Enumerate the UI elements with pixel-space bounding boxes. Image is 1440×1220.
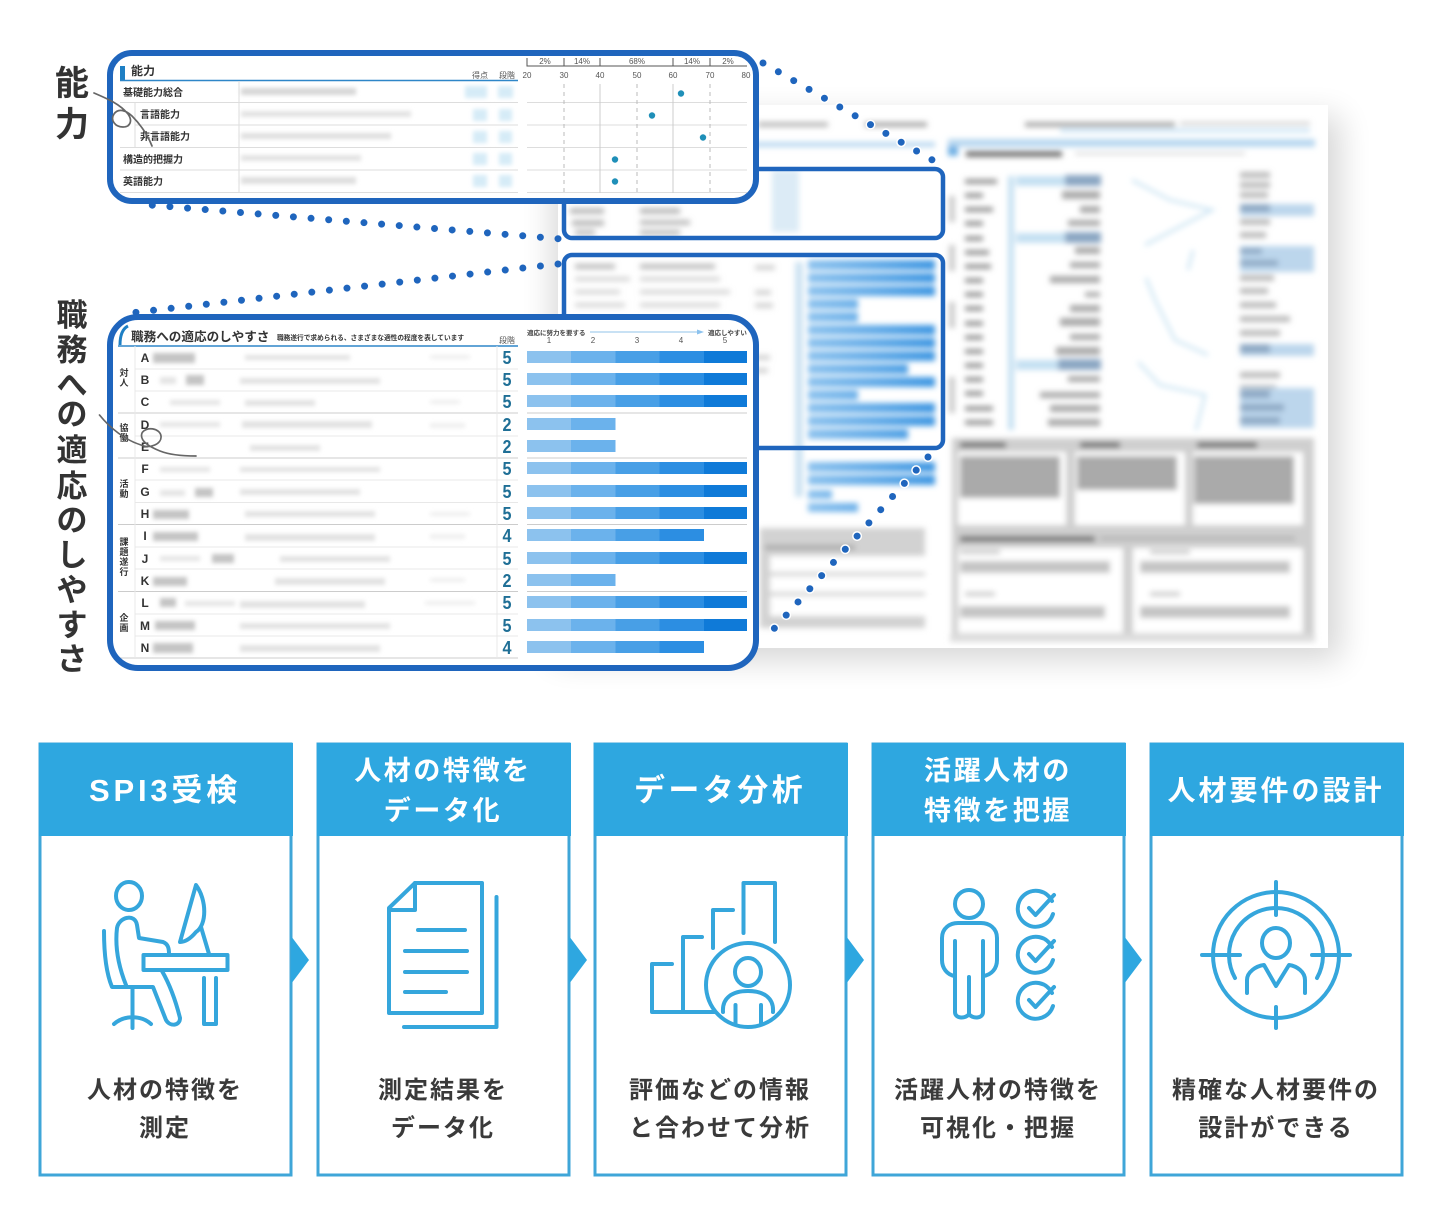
card 4 text: 可視化・把握	[920, 1115, 1076, 1142]
card 2 text: 測定結果を	[378, 1077, 508, 1104]
stage numbers	[502, 348, 512, 658]
score chart: 80	[742, 71, 751, 80]
card 1 text	[87, 1077, 243, 1142]
card 3 heading: データ分析	[634, 773, 806, 808]
heading: ability: 能力	[131, 63, 155, 78]
ability rows: 言語能力	[140, 108, 180, 121]
heading: job fit: 段階	[499, 335, 515, 345]
row letters: I	[143, 529, 147, 543]
card 3 text	[629, 1077, 811, 1142]
stage numbers: 5	[502, 459, 512, 479]
category labels: 題	[119, 547, 129, 557]
stage numbers: 5	[502, 504, 512, 524]
bar scale: 適応に努力を要する	[527, 328, 586, 337]
ability rows: 非言語能力	[140, 130, 190, 143]
row letters: F	[141, 462, 149, 476]
row letters: B	[141, 373, 150, 387]
panel: job fit zoom	[110, 317, 756, 668]
score chart: 30	[560, 71, 569, 80]
dotted connectors	[130, 63, 934, 641]
card 1 heading: SPI3受検	[89, 773, 241, 808]
bar scale: 2	[591, 336, 596, 345]
table column labels: 得点	[472, 70, 488, 80]
arrow 4	[1124, 936, 1142, 984]
card 5 text: 設計ができる	[1198, 1114, 1354, 1142]
score chart: 50	[633, 71, 642, 80]
highlight box: job fit section	[564, 255, 943, 448]
stage numbers: 5	[502, 593, 512, 613]
label: ability: 能力	[55, 65, 89, 144]
label: job fit: 職務への適応のしやすさ	[56, 298, 88, 677]
heading: job fit: 職務遂行で求められる、さまざまな適性の程度を表しています	[277, 333, 464, 342]
row letters: N	[141, 641, 149, 655]
arrow 2	[569, 936, 587, 984]
leader line: ability	[94, 93, 152, 146]
score chart	[523, 57, 751, 193]
category labels: 画	[119, 623, 129, 633]
blurred ability text	[241, 86, 513, 187]
left column	[570, 208, 715, 269]
heading: job fit: 職務への適応のしやすさ	[131, 329, 269, 344]
ability rows	[120, 81, 747, 193]
icon: target person	[1202, 882, 1350, 1028]
category labels: 行	[119, 566, 129, 577]
category labels: 対	[119, 367, 129, 378]
category labels: 働	[119, 432, 129, 443]
step card 2	[317, 743, 571, 1175]
step card 4	[872, 743, 1126, 1175]
stage numbers: 2	[502, 415, 512, 435]
card 4 heading: 活躍人材の	[924, 756, 1072, 786]
ability rows: 基礎能力総合	[123, 86, 183, 99]
score chart: 20	[523, 71, 532, 80]
icon: person with checks	[942, 890, 1054, 1019]
card 1 text: 測定	[139, 1115, 191, 1142]
icon: document	[389, 883, 496, 1027]
score chart: 2%	[539, 57, 551, 66]
card 2 heading: 人材の特徴を	[354, 756, 532, 786]
gray boxes right	[952, 438, 1314, 638]
category labels: 課	[119, 537, 129, 547]
heading: ability	[120, 64, 154, 80]
stage numbers: 2	[502, 571, 512, 591]
panel: ability zoom	[110, 53, 756, 201]
row letters: C	[141, 395, 150, 409]
card 5 text: 精確な人材要件の	[1172, 1077, 1380, 1104]
card 2 heading	[354, 756, 532, 826]
stage numbers: 5	[502, 616, 512, 636]
blurred row text	[153, 353, 475, 653]
row labels	[965, 179, 997, 425]
row letters: K	[141, 574, 150, 588]
category labels: 遂	[119, 556, 129, 567]
row letters: E	[141, 440, 149, 454]
score chart: 14%	[574, 57, 590, 66]
stage numbers: 5	[502, 482, 512, 502]
icon: bars and person	[652, 883, 790, 1027]
bar scale	[527, 330, 746, 343]
step card 5	[1150, 743, 1404, 1175]
row letters: J	[142, 552, 148, 566]
category labels: 活	[119, 478, 129, 489]
card 4 text	[894, 1077, 1102, 1142]
score chart: 68%	[629, 57, 645, 66]
card 1 text: 人材の特徴を	[87, 1077, 243, 1104]
category labels	[119, 367, 129, 633]
score chart: 14%	[684, 57, 700, 66]
card 5 heading: 人材要件の設計	[1167, 775, 1385, 806]
step card 1	[39, 743, 293, 1175]
stage numbers: 5	[502, 370, 512, 390]
table column labels: 段階	[499, 70, 515, 80]
bar scale: 適応しやすい	[708, 328, 747, 337]
stage numbers: 5	[502, 392, 512, 412]
category labels: 企	[119, 612, 129, 623]
card 5 text	[1172, 1077, 1380, 1142]
card 3 text: 評価などの情報	[629, 1077, 811, 1104]
card 4 text: 活躍人材の特徴を	[894, 1077, 1102, 1104]
stage numbers: 5	[502, 549, 512, 569]
table column labels	[472, 71, 515, 79]
row letters: D	[141, 418, 150, 432]
stage bars	[527, 351, 747, 653]
category labels: 動	[119, 488, 129, 499]
ability rows: 英語能力	[123, 175, 163, 188]
highlight box: ability section	[564, 169, 943, 238]
score chart: 70	[706, 71, 715, 80]
row letters: H	[141, 507, 149, 521]
row letters: A	[141, 351, 150, 365]
category labels: 人	[119, 378, 129, 388]
bar scale: 1	[547, 336, 552, 345]
row letters: L	[141, 596, 149, 610]
card 4 heading: 特徴を把握	[924, 796, 1072, 826]
arrow 1	[291, 936, 309, 984]
row letters	[140, 354, 150, 652]
bar scale: 5	[723, 336, 728, 345]
stage numbers: 4	[502, 638, 512, 658]
card 3 text: と合わせて分析	[629, 1115, 811, 1142]
card 2 text	[378, 1077, 508, 1142]
stage numbers: 4	[502, 526, 512, 546]
row letters: G	[140, 485, 150, 499]
report sheet: blurred background document	[553, 105, 1340, 660]
bar scale: 3	[635, 336, 640, 345]
card 4 heading	[924, 756, 1072, 826]
score chart: 40	[596, 71, 605, 80]
heading: job fit	[120, 326, 515, 345]
row letters: M	[140, 619, 150, 633]
bar scale: 4	[679, 336, 684, 345]
ability rows: 構造的把握力	[123, 153, 183, 166]
card 2 text: データ化	[391, 1114, 495, 1142]
step card 3	[594, 743, 848, 1175]
score chart: 60	[669, 71, 678, 80]
arrow 3	[846, 936, 864, 984]
icon: person at desk	[104, 882, 228, 1028]
category labels: 協	[119, 422, 129, 433]
stage numbers: 5	[502, 348, 512, 368]
leader line: job fit	[100, 415, 196, 456]
stage numbers: 2	[502, 437, 512, 457]
card 2 heading: データ化	[384, 795, 502, 826]
score chart: 2%	[722, 57, 734, 66]
